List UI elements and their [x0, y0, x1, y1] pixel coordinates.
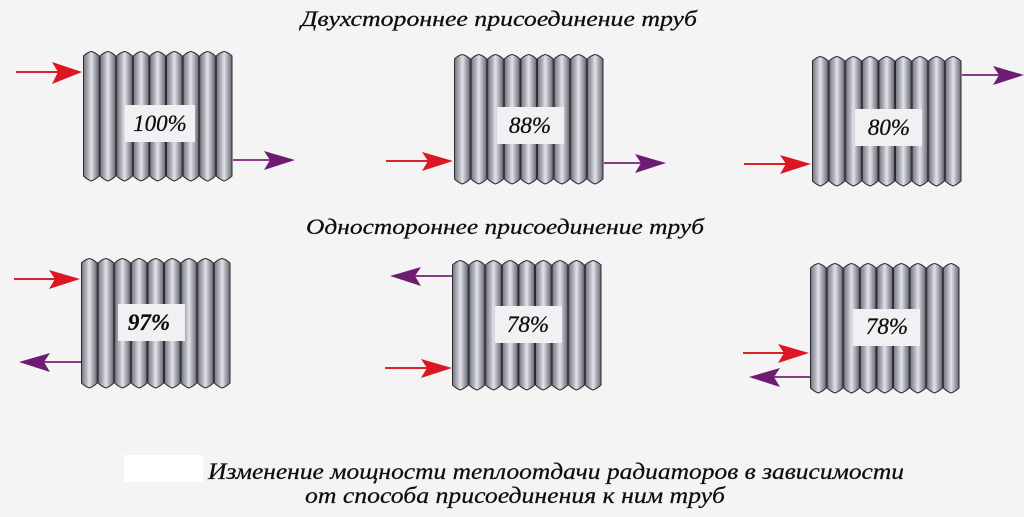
arrow: red inlet radiator 6 [743, 344, 809, 363]
white patch [124, 455, 203, 482]
arrow: purple outlet radiator 2 [604, 154, 666, 173]
caption [207, 459, 904, 508]
arrow: red inlet radiator 2 [386, 152, 453, 171]
arrow: purple outlet radiator 4 [19, 353, 81, 372]
caption: Изменение мощности теплоотдачи радиаторов в зависимости [207, 459, 904, 484]
arrow: red inlet radiator 1 [16, 62, 82, 84]
arrow: red inlet radiator 5 [385, 359, 452, 378]
radiator 97% [82, 258, 230, 388]
radiator 80%: 80% [868, 115, 910, 140]
arrow: purple outlet radiator 5 [390, 267, 452, 286]
caption: от способа присоединения к ним труб [305, 483, 727, 508]
radiator 80% [812, 56, 961, 186]
arrow: purple outlet radiator 3 [962, 66, 1024, 85]
radiator 97%: 97% [128, 310, 170, 335]
radiator 78% right: 78% [866, 314, 908, 339]
arrow: red inlet radiator 4 [14, 270, 80, 289]
radiator 88%: 88% [509, 113, 551, 138]
radiator 100%: 100% [133, 111, 187, 136]
radiator 78% centre [452, 260, 601, 390]
radiator 100% [84, 52, 232, 181]
radiator 78% right [810, 264, 959, 393]
arrow: red inlet radiator 3 [744, 155, 811, 174]
heading: one-sided connection: Одностороннее присоединение труб [306, 214, 705, 239]
radiator 78% centre: 78% [507, 312, 549, 337]
arrow: purple outlet radiator 1 [233, 151, 295, 170]
radiator 88% [454, 54, 603, 184]
arrow: purple outlet radiator 6 [749, 368, 810, 387]
heading: two-sided connection: Двухстороннее присоединение труб [299, 6, 698, 31]
